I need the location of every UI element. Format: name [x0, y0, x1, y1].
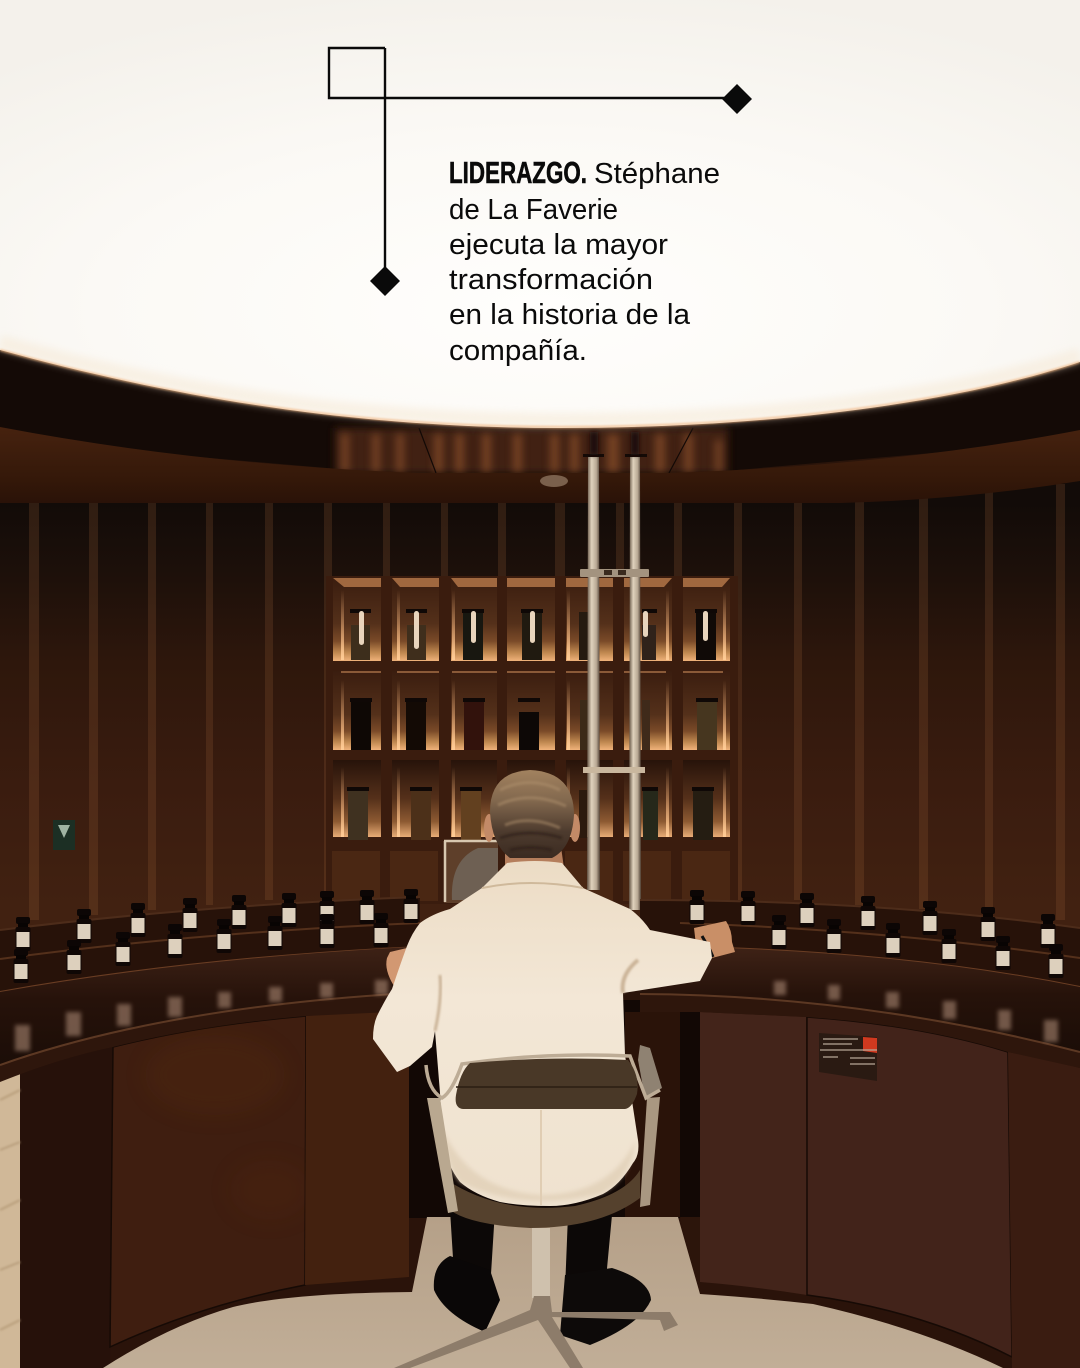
- caption text: en la historia de la: [449, 299, 691, 331]
- pole clamp: [580, 569, 649, 577]
- info plaque: [819, 1033, 877, 1081]
- chair: [394, 1045, 678, 1368]
- caption text: compañía.: [449, 335, 587, 367]
- cabinet fascia: [0, 992, 430, 1082]
- chair base: [394, 1296, 678, 1368]
- counter top surface: [0, 946, 1080, 1065]
- right panels: [700, 1012, 1080, 1368]
- reflections: [15, 980, 1058, 1051]
- chair side frames: [427, 1098, 458, 1213]
- caption text: de La Faverie: [449, 194, 618, 226]
- chair back pad: [456, 1059, 638, 1109]
- wood panel wall: [0, 480, 1080, 930]
- niches top row: [333, 578, 730, 661]
- stepped counter with bottles, left: [0, 889, 420, 996]
- floor carpet: [103, 1217, 1003, 1368]
- diamond bottom: [370, 266, 400, 296]
- diamond right: [722, 84, 752, 114]
- caption text: LIDERAZGO.: [449, 155, 587, 190]
- bottles: [690, 890, 1064, 978]
- hand left: [386, 948, 408, 986]
- trousers and shoes: [434, 1210, 651, 1345]
- steel poles: [580, 432, 649, 910]
- man in white coat on chair: [373, 770, 735, 1368]
- safety sign on wall: [53, 820, 75, 850]
- jars: [347, 609, 718, 840]
- lower shelf panels: [332, 851, 730, 901]
- pole crossbar: [583, 767, 645, 773]
- marble strip: [0, 1064, 20, 1368]
- stepped counter with bottles, right: [640, 890, 1080, 992]
- caption text: Stéphane: [594, 158, 720, 190]
- ears: [484, 814, 494, 842]
- left panels: [20, 1010, 409, 1368]
- dark cove under ceiling: [0, 340, 1080, 503]
- chair right armrest: [638, 1045, 662, 1098]
- caption text: transformación: [449, 264, 653, 296]
- chair seat: [447, 1170, 640, 1228]
- fascia band: [0, 427, 1080, 503]
- niches bottom row: [333, 760, 730, 837]
- neck: [505, 840, 565, 875]
- caption text: ejecuta la mayor: [449, 229, 668, 261]
- hand right with watch: [694, 921, 735, 958]
- niches middle row: [333, 671, 730, 750]
- warm soffit with light stripes: [335, 428, 728, 473]
- shelf with glowing niches: [326, 576, 738, 904]
- chair back frame: [426, 1055, 660, 1098]
- caption text: [449, 155, 720, 367]
- right ear: [570, 814, 580, 842]
- glass display box: [444, 841, 498, 903]
- lower cabinets: [0, 992, 1080, 1368]
- under desk dark: [409, 1000, 700, 1218]
- bottles: [14, 889, 418, 983]
- square and lines: [329, 48, 737, 281]
- illuminated ceiling: [0, 0, 1080, 428]
- graphic callout: bracket lines with diamonds: [329, 48, 752, 296]
- white coat: [373, 861, 712, 1206]
- hair: [490, 770, 574, 858]
- chair stem: [532, 1228, 550, 1298]
